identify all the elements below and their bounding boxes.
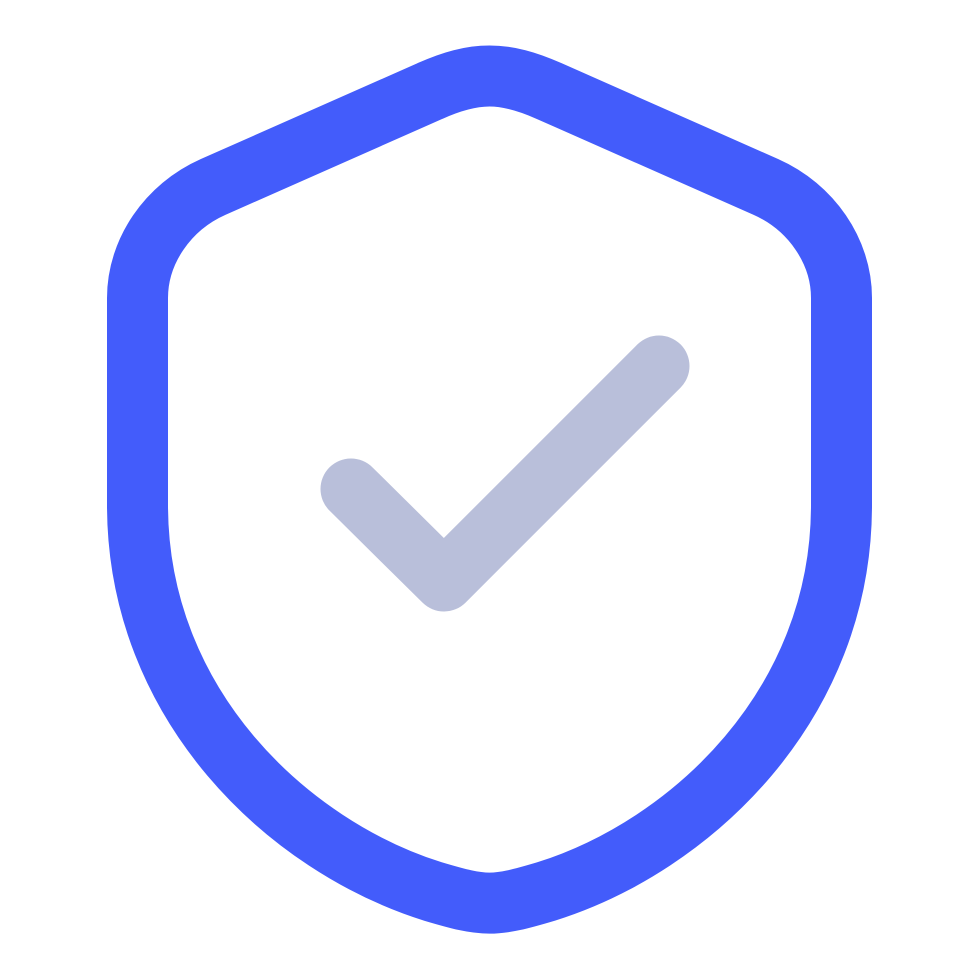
check mark <box>351 366 659 581</box>
shield outline <box>138 76 842 903</box>
